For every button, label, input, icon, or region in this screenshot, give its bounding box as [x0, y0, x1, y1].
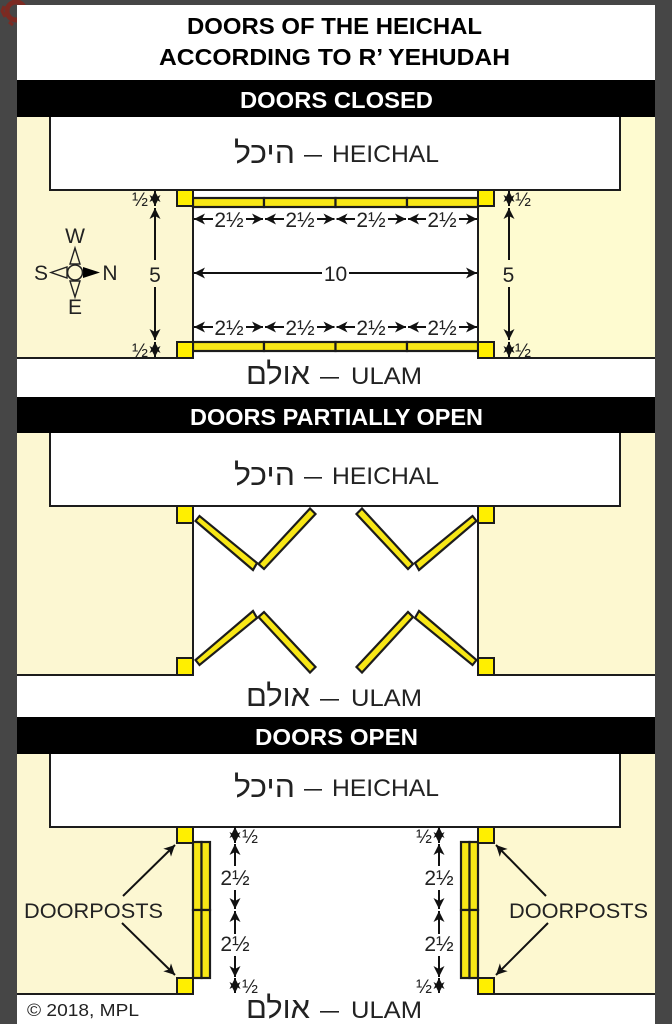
copyright: © 2018, MPL	[27, 1000, 139, 1020]
dimensions: right wall: ½	[515, 341, 531, 362]
dimensions: left wall: ½	[132, 341, 148, 362]
dimensions: upper door widths: 2½	[356, 209, 386, 232]
title: DOORS OF THE HEICHAL	[187, 13, 482, 39]
label: Heichal: HEICHAL	[332, 141, 439, 168]
label: Heichal: היכל	[234, 137, 295, 170]
dimensions: left open doors: ½	[242, 977, 258, 998]
callout: doorposts right: DOORPOSTS	[509, 900, 648, 923]
dimensions: left wall: 5	[149, 264, 161, 287]
floor plan: walls	[17, 433, 655, 675]
dimensions: lower door widths: 2½	[356, 317, 386, 340]
label: Heichal: היכל	[234, 459, 295, 492]
dimensions: left open doors	[220, 827, 258, 998]
dimensions: upper door widths: 2½	[285, 209, 315, 232]
dimensions: right wall: ½	[515, 190, 531, 211]
icon: compass: S	[34, 262, 48, 285]
callout: doorposts right	[496, 845, 648, 975]
doors: folded left	[193, 842, 210, 978]
dimensions: upper door widths	[194, 209, 477, 232]
doors: south leaves, right	[356, 611, 476, 672]
floor plan: walls	[17, 117, 655, 358]
dimensions: right open doors: ½	[416, 827, 432, 848]
heading: doors closed: DOORS CLOSED	[240, 87, 433, 113]
dimensions: lower door widths: 2½	[285, 317, 315, 340]
doors: folded right	[461, 842, 478, 978]
doors: north leaves, right	[356, 508, 476, 570]
label: Heichal: HEICHAL	[332, 463, 439, 490]
label: Heichal: HEICHAL	[332, 775, 439, 802]
dimensions: right open doors	[416, 827, 454, 998]
label: Ulam	[246, 680, 422, 713]
label: Heichal	[234, 771, 439, 804]
heading: doors partially open	[17, 397, 655, 433]
icon: compass: N	[102, 262, 118, 285]
panel: doors open	[17, 717, 655, 1024]
dimensions: left open doors: ½	[242, 827, 258, 848]
label: Heichal	[234, 137, 439, 170]
title	[159, 13, 510, 70]
dimensions: lower door widths: 2½	[427, 317, 457, 340]
label: Ulam: אולם	[246, 680, 310, 713]
callout: doorposts left: DOORPOSTS	[24, 900, 163, 923]
heading: doors closed	[17, 80, 655, 117]
doors: south leaves, left	[196, 611, 316, 672]
doorposts	[177, 827, 494, 994]
icon: red gear behind page	[2, 2, 25, 25]
doors: north leaves, left	[196, 508, 316, 570]
dimensions: left open doors: 2½	[220, 867, 250, 890]
label: Ulam: אולם	[246, 358, 310, 391]
closed doors: north side	[193, 198, 478, 207]
dimensions: left wall	[132, 190, 161, 362]
label: Ulam	[246, 358, 422, 391]
dimensions: right open doors: ½	[416, 977, 432, 998]
heading: doors partially open: DOORS PARTIALLY OPEN	[190, 404, 483, 430]
icon: compass: E	[68, 296, 82, 319]
heading: doors open	[17, 717, 655, 754]
dimension: total width 10: 10	[324, 263, 347, 286]
panel: doors closed	[17, 80, 655, 391]
title: ACCORDING TO R’ YEHUDAH	[159, 44, 510, 70]
label: Ulam: ULAM	[351, 363, 422, 390]
label: Ulam	[246, 992, 422, 1024]
heading: doors open: DOORS OPEN	[255, 724, 418, 750]
doorposts	[177, 506, 494, 675]
dimensions: lower door widths	[194, 317, 477, 340]
label: Ulam: ULAM	[351, 997, 422, 1024]
label: Heichal: היכל	[234, 771, 295, 804]
dimensions: right open doors: 2½	[424, 867, 454, 890]
icon: compass: W	[65, 225, 85, 248]
dimensions: right open doors: 2½	[424, 933, 454, 956]
dimensions: right wall	[503, 190, 531, 362]
icon: compass	[34, 225, 118, 319]
label: Heichal	[234, 459, 439, 492]
dimensions: right wall: 5	[503, 264, 514, 287]
panel: doors partially open	[17, 397, 655, 713]
dimensions: left open doors: 2½	[220, 933, 250, 956]
callout: doorposts left	[24, 845, 175, 975]
doorposts	[177, 190, 494, 358]
dimensions: lower door widths: 2½	[214, 317, 244, 340]
label: Ulam: ULAM	[351, 685, 422, 712]
floor plan: walls	[17, 754, 655, 994]
dimensions: upper door widths: 2½	[427, 209, 457, 232]
dimensions: left wall: ½	[132, 190, 148, 211]
closed doors: south side	[193, 342, 478, 351]
dimensions: upper door widths: 2½	[214, 209, 244, 232]
